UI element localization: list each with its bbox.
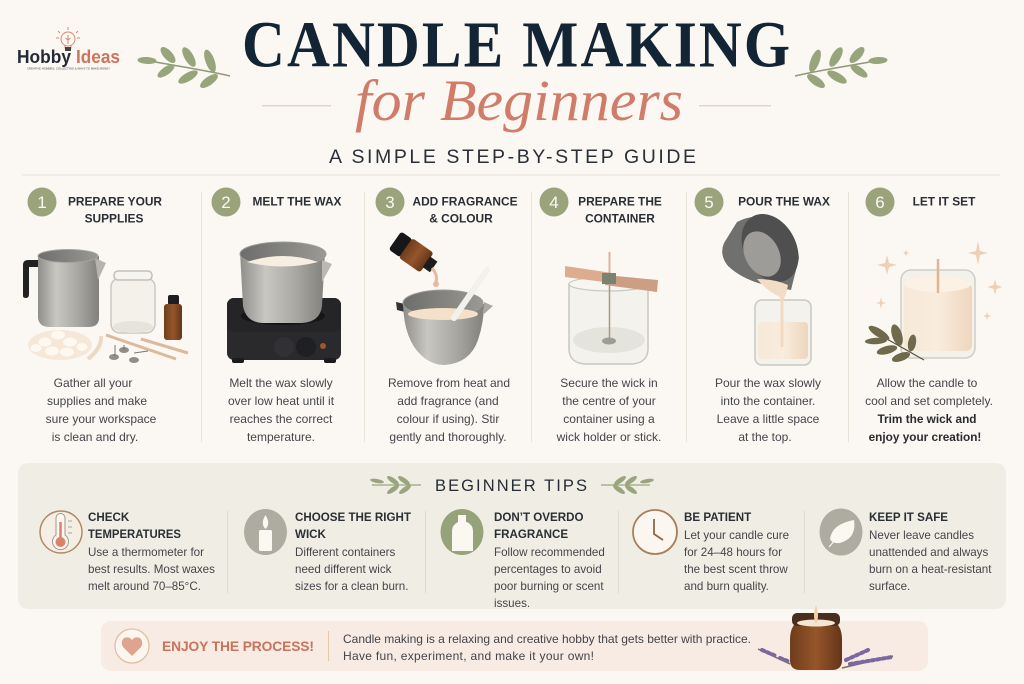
illustration: amber jar candle with lavender xyxy=(758,605,893,670)
tip text: safe: burn on a heat-resistant xyxy=(869,563,992,576)
tip text: safe: Never leave candles xyxy=(869,529,974,542)
step text 1: sure your workspace xyxy=(46,412,157,426)
step text 5: at the top. xyxy=(738,430,792,444)
step heading 2: MELT THE WAX xyxy=(253,194,342,208)
illustration: bowl and fragrance xyxy=(388,231,493,365)
tip text: temperatures: melt around 70–85°C. xyxy=(88,580,201,593)
logo: Ideas xyxy=(76,46,120,67)
icon: heart xyxy=(115,629,149,663)
tip text: safe: KEEP IT SAFE xyxy=(869,511,948,524)
step 3: add fragrance and colour xyxy=(376,188,518,444)
step text 1: is clean and dry. xyxy=(52,430,138,444)
tip: don't overdo fragrance xyxy=(440,509,605,610)
step number 5: 5 xyxy=(704,193,714,212)
step text 2: temperature. xyxy=(247,430,315,444)
illustration: pot on hot plate xyxy=(227,242,341,363)
step number 1: 1 xyxy=(37,193,47,212)
step number 6: 6 xyxy=(875,193,885,212)
banner text xyxy=(343,632,751,663)
step text 5: into the container. xyxy=(721,394,815,408)
step text 1: supplies and make xyxy=(47,394,147,408)
step text 2 xyxy=(228,376,335,444)
right sprig xyxy=(795,45,888,90)
tip: check temperatures xyxy=(40,511,215,593)
tip: keep it safe xyxy=(820,508,992,593)
icon: bottle xyxy=(440,509,484,555)
step text 5 xyxy=(715,376,821,444)
step number 2: 2 xyxy=(221,193,231,212)
tip text: fragrance xyxy=(494,511,605,610)
step heading 4 xyxy=(578,194,662,226)
step text 3 xyxy=(388,376,510,444)
step heading 1: PREPARE YOUR xyxy=(68,194,162,208)
step heading 1 xyxy=(68,194,162,226)
logo xyxy=(17,27,120,70)
panel: beginner tips xyxy=(18,463,1006,610)
logo wordmark: Hobby xyxy=(17,46,72,67)
tip text: wick: WICK xyxy=(295,528,327,541)
step number 3 xyxy=(376,188,404,216)
tips heading: BEGINNER TIPS xyxy=(435,477,587,495)
icon: left tips sprig xyxy=(370,474,421,496)
tip text: patient: and burn quality. xyxy=(684,580,769,593)
step number 5 xyxy=(694,188,724,216)
illustration: finished candle xyxy=(865,241,1002,364)
title: CANDLE MAKING xyxy=(242,8,790,81)
step 1: prepare your supplies xyxy=(23,188,188,444)
step 5: pour the wax xyxy=(694,188,830,444)
step text 3: colour if using). Stir xyxy=(397,412,499,426)
tip text: safe xyxy=(869,511,992,593)
icon: leaf xyxy=(820,508,862,556)
tip text: fragrance: issues. xyxy=(494,597,530,610)
tip text: patient xyxy=(684,511,789,593)
tip text: patient: BE PATIENT xyxy=(684,511,751,524)
banner: enjoy the process xyxy=(101,605,928,671)
step text 6: Trim the wick and xyxy=(878,412,976,426)
step text 6: enjoy your creation! xyxy=(869,430,981,444)
step text 4: wick holder or stick. xyxy=(556,430,661,444)
icon: light bulb xyxy=(56,27,80,51)
tip text: safe: surface. xyxy=(869,580,910,593)
step number 1 xyxy=(28,188,56,216)
tip text: temperatures: CHECK xyxy=(88,511,130,524)
step 6: let it set xyxy=(865,188,1002,444)
step heading 1: SUPPLIES xyxy=(85,212,143,226)
step text 1: Gather all your xyxy=(54,376,132,390)
step text 3: gently and thoroughly. xyxy=(389,430,507,444)
step heading 4: PREPARE THE xyxy=(578,194,662,208)
step text 4: the centre of your xyxy=(562,394,656,408)
tip text: safe: unattended and always xyxy=(869,546,988,559)
tip text: temperatures: Use a thermometer for xyxy=(88,546,204,559)
step text 4 xyxy=(556,376,661,444)
banner heading: ENJOY THE PROCESS! xyxy=(162,639,314,654)
title flourish: for Beginners: for Beginners xyxy=(355,68,683,133)
step heading 6: LET IT SET xyxy=(913,194,976,208)
step heading 3: & COLOUR xyxy=(429,212,493,226)
illustration: glass with wick holder xyxy=(565,252,658,364)
tip text: patient: Let your candle cure xyxy=(684,529,789,542)
tip text: wick: CHOOSE THE RIGHT xyxy=(295,511,411,524)
tip text: temperatures xyxy=(88,511,215,593)
tip text: wick: Different containers xyxy=(295,546,396,559)
step text 5: Pour the wax slowly xyxy=(715,376,821,390)
tip text: fragrance: FRAGRANCE xyxy=(494,528,568,541)
step text 2: Melt the wax slowly xyxy=(229,376,333,390)
tip text: fragrance: DON’T OVERDO xyxy=(494,511,584,524)
step text 5: Leave a little space xyxy=(717,412,820,426)
tip text: temperatures: best results. Most waxes xyxy=(88,563,215,576)
step text 2: reaches the correct xyxy=(230,412,333,426)
step text 1 xyxy=(46,376,157,444)
tip text: patient: the best scent throw xyxy=(684,563,788,576)
icon: thermometer xyxy=(40,511,82,553)
step 4: prepare the container xyxy=(540,188,662,444)
tip text: temperatures: TEMPERATURES xyxy=(88,528,181,541)
step heading 5: POUR THE WAX xyxy=(738,194,830,208)
tip: choose the right wick xyxy=(244,509,411,593)
step text 2: over low heat until it xyxy=(228,394,335,408)
tip text: wick: sizes for a clean burn. xyxy=(295,580,408,593)
step 2: melt the wax xyxy=(212,188,342,444)
illustration: pouring wax xyxy=(722,204,811,365)
step text 6: Allow the candle to xyxy=(877,376,978,390)
subtitle: A SIMPLE STEP-BY-STEP GUIDE xyxy=(329,146,696,168)
step number 4 xyxy=(540,188,568,216)
tip text: wick: need different wick xyxy=(295,563,392,576)
step heading 3: ADD FRAGRANCE xyxy=(412,194,518,208)
tip text: fragrance: poor burning or scent xyxy=(494,580,604,593)
step text 4: container using a xyxy=(563,412,655,426)
step text 6 xyxy=(865,376,993,444)
step heading 4: CONTAINER xyxy=(585,212,655,226)
step text 6: cool and set completely. xyxy=(865,394,993,408)
icon: candle xyxy=(244,509,287,555)
banner text: Candle making is a relaxing and creative hobby that gets better with practice. xyxy=(343,632,751,646)
step number 6 xyxy=(866,188,894,216)
tip text: fragrance: percentages to avoid xyxy=(494,563,602,576)
step text 4: Secure the wick in xyxy=(560,376,658,390)
illustration: supplies xyxy=(23,250,188,363)
left sprig xyxy=(137,45,230,90)
banner text: Have fun, experiment, and make it your own! xyxy=(343,649,594,663)
step number 2 xyxy=(212,188,240,216)
step text 3: add fragrance (and xyxy=(397,394,499,408)
step number 4: 4 xyxy=(549,193,559,212)
tip text: wick xyxy=(295,511,411,593)
icon: clock xyxy=(633,510,677,554)
step number 3: 3 xyxy=(385,193,395,212)
icon: right tips sprig xyxy=(601,474,654,496)
tip text: patient: for 24–48 hours for xyxy=(684,546,782,559)
step heading 3 xyxy=(412,194,518,226)
step text 3: Remove from heat and xyxy=(388,376,510,390)
logo tagline: CREATIVE HOBBIES, COLLECTING & WAYS TO MAKE MONEY xyxy=(27,66,110,70)
tip: be patient xyxy=(633,510,789,593)
tip text: fragrance: Follow recommended xyxy=(494,546,605,559)
